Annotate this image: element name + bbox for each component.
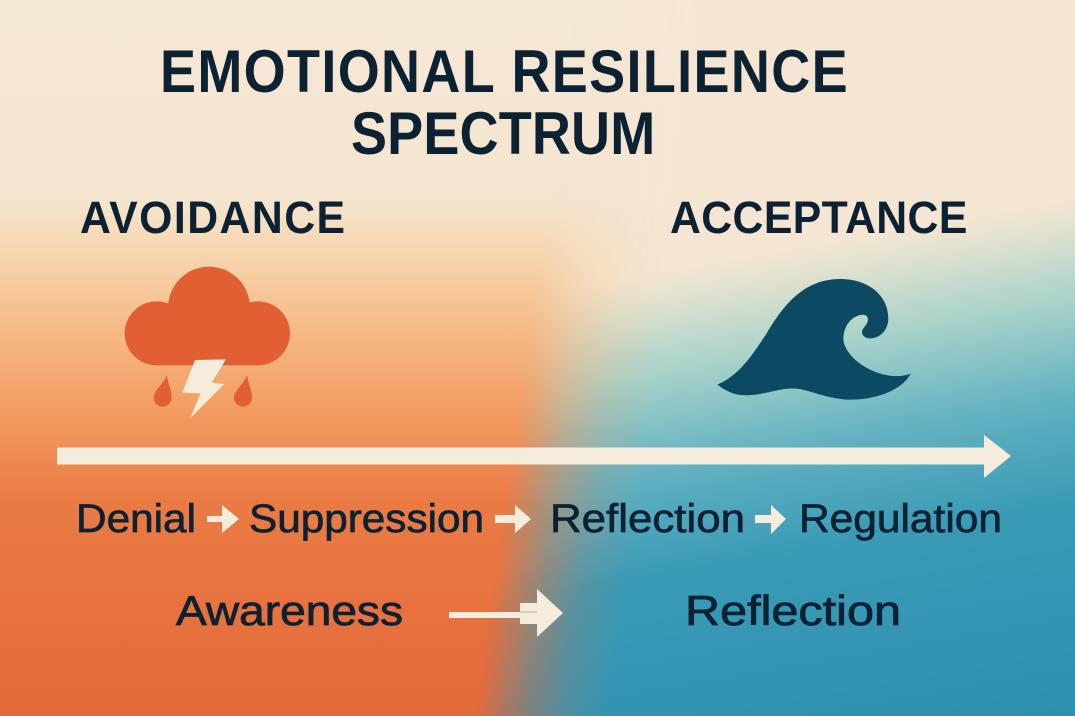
title: EMOTIONAL RESILIENCE [160,38,848,106]
lightning bolt [182,359,226,418]
title [160,38,848,168]
background gradient [0,200,1075,716]
step label: regulation: Regulation [799,497,1002,541]
heading: acceptance: ACCEPTANCE [670,193,967,243]
step label: denial: Denial [76,497,196,541]
arrow: reflection to regulation [755,505,786,534]
arrow: denial to suppression [207,505,239,533]
step label: reflection: Reflection [550,497,745,541]
arrow: awareness to reflection [449,589,563,637]
icon: storm cloud [125,267,290,418]
cloud body [125,267,290,365]
rain drop right [234,375,252,407]
main spectrum arrow [57,435,1011,478]
arrow: suppression to reflection [495,505,531,533]
step label: suppression: Suppression [249,497,484,541]
rain drop left [154,375,172,407]
icon: wave [717,279,911,400]
title: SPECTRUM [351,100,655,168]
label: awareness: Awareness [176,587,403,634]
heading: avoidance: AVOIDANCE [80,193,345,243]
label: reflection: Reflection [685,587,901,634]
